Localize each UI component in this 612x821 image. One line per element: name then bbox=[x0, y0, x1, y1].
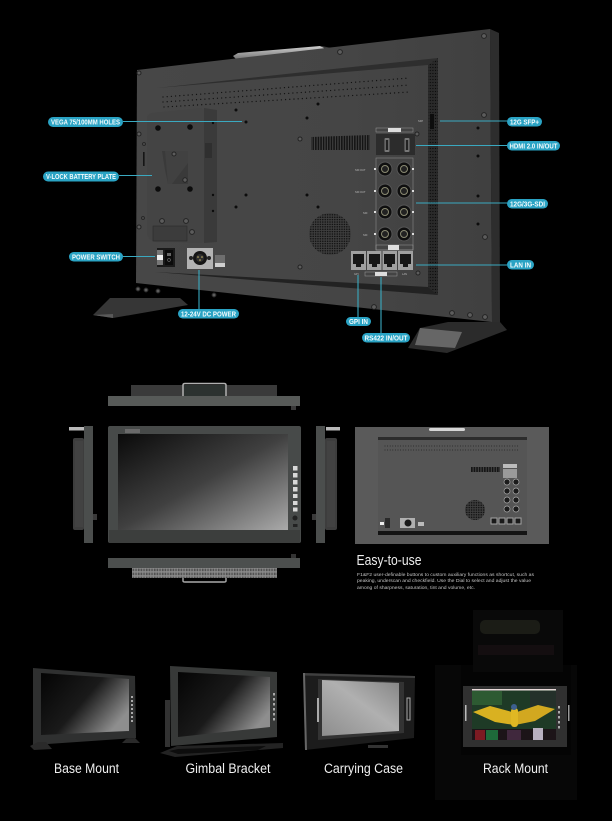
left side view bbox=[69, 426, 97, 543]
color screen with parrot bbox=[472, 689, 556, 740]
certification label bbox=[215, 255, 225, 267]
description text: peaking, underscan and checkfield. Use the Dial to select and adjust the value bbox=[357, 578, 531, 583]
screen bbox=[118, 434, 288, 530]
callout: RS422: RS422 IN/OUT bbox=[364, 334, 408, 342]
callout: power switch: POWER SWITCH bbox=[72, 252, 120, 262]
RJ45 ports: GPI bbox=[354, 272, 359, 276]
callout: SFP bbox=[440, 117, 542, 126]
accessory: rack mount with monitors bbox=[435, 610, 577, 800]
SFP port bbox=[418, 114, 434, 129]
label: Rack Mount: Rack Mount bbox=[483, 761, 548, 776]
carry handle bbox=[233, 46, 340, 64]
accessory: base mount monitor bbox=[30, 668, 140, 750]
logo badge bbox=[125, 429, 140, 433]
callout: SDI bbox=[416, 199, 548, 208]
accessory: gimbal bracket monitor bbox=[160, 666, 283, 757]
SDI BNC connectors: SDI OUT bbox=[355, 190, 366, 194]
top view bbox=[108, 384, 300, 410]
rear thumbnail view bbox=[355, 427, 549, 544]
SDI BNC connectors bbox=[355, 158, 414, 250]
callout: DC power: 12-24V DC POWER bbox=[181, 310, 236, 318]
callout: HDMI: HDMI 2.0 IN/OUT bbox=[510, 142, 558, 150]
accessory: carrying case bbox=[303, 673, 415, 750]
description text: among of sharpness, saturation, tint and volume, etc. bbox=[357, 585, 475, 590]
callout: GPI bbox=[346, 275, 371, 326]
callout: LAN: LAN IN bbox=[510, 260, 531, 270]
front buttons bbox=[292, 466, 298, 527]
vent slots bbox=[311, 135, 370, 150]
callout: VESA holes bbox=[48, 117, 242, 127]
label: Gimbal Bracket: Gimbal Bracket bbox=[186, 761, 271, 776]
HDMI ports bbox=[376, 128, 415, 155]
callout: VESA holes: VEGA 75/100MM HOLES bbox=[51, 118, 120, 127]
callout: SDI: 12G/3G-SDI bbox=[510, 200, 545, 208]
SDI BNC connectors: SDI OUT bbox=[355, 168, 366, 172]
SDI BNC connectors: SDI bbox=[363, 233, 368, 237]
callout: power switch bbox=[69, 252, 155, 262]
callout: V-lock plate: V-LOCK BATTERY PLATE bbox=[46, 172, 116, 181]
upper monitor dimmed bbox=[473, 610, 563, 672]
power switch bbox=[157, 248, 175, 267]
description text: F1&F2 user-definable buttons to custom auxiliary functions as shortcut, such as bbox=[357, 572, 535, 577]
callout: RS422 bbox=[362, 277, 410, 342]
callout: HDMI bbox=[416, 141, 560, 150]
RJ45 ports bbox=[351, 251, 413, 276]
bottom view bbox=[108, 554, 300, 582]
callout: SFP: 12G SFP+ bbox=[510, 118, 539, 126]
callout: LAN bbox=[416, 260, 534, 270]
left foot bbox=[93, 298, 188, 318]
callout: GPI: GPI IN bbox=[349, 317, 368, 326]
DC power XLR socket bbox=[187, 248, 213, 269]
callout: DC power bbox=[178, 270, 239, 318]
speaker grille bbox=[309, 213, 351, 255]
right side view bbox=[312, 426, 340, 543]
lower monitor bbox=[463, 686, 567, 747]
rear housing bbox=[136, 29, 500, 322]
SDI BNC connectors: SDI bbox=[363, 211, 368, 215]
SFP port: SFP bbox=[418, 119, 423, 123]
monitor rear view bbox=[93, 29, 507, 353]
right foot bbox=[408, 322, 507, 353]
front view bbox=[108, 426, 301, 543]
V-lock battery plate bbox=[147, 108, 217, 243]
label: Carrying Case: Carrying Case bbox=[324, 761, 403, 776]
heading: Easy-to-use: Easy-to-use bbox=[356, 553, 422, 569]
description text bbox=[357, 572, 535, 590]
label: Base Mount: Base Mount bbox=[54, 761, 119, 776]
screws and mounting holes bbox=[136, 34, 487, 319]
RJ45 ports: LAN bbox=[402, 272, 407, 276]
